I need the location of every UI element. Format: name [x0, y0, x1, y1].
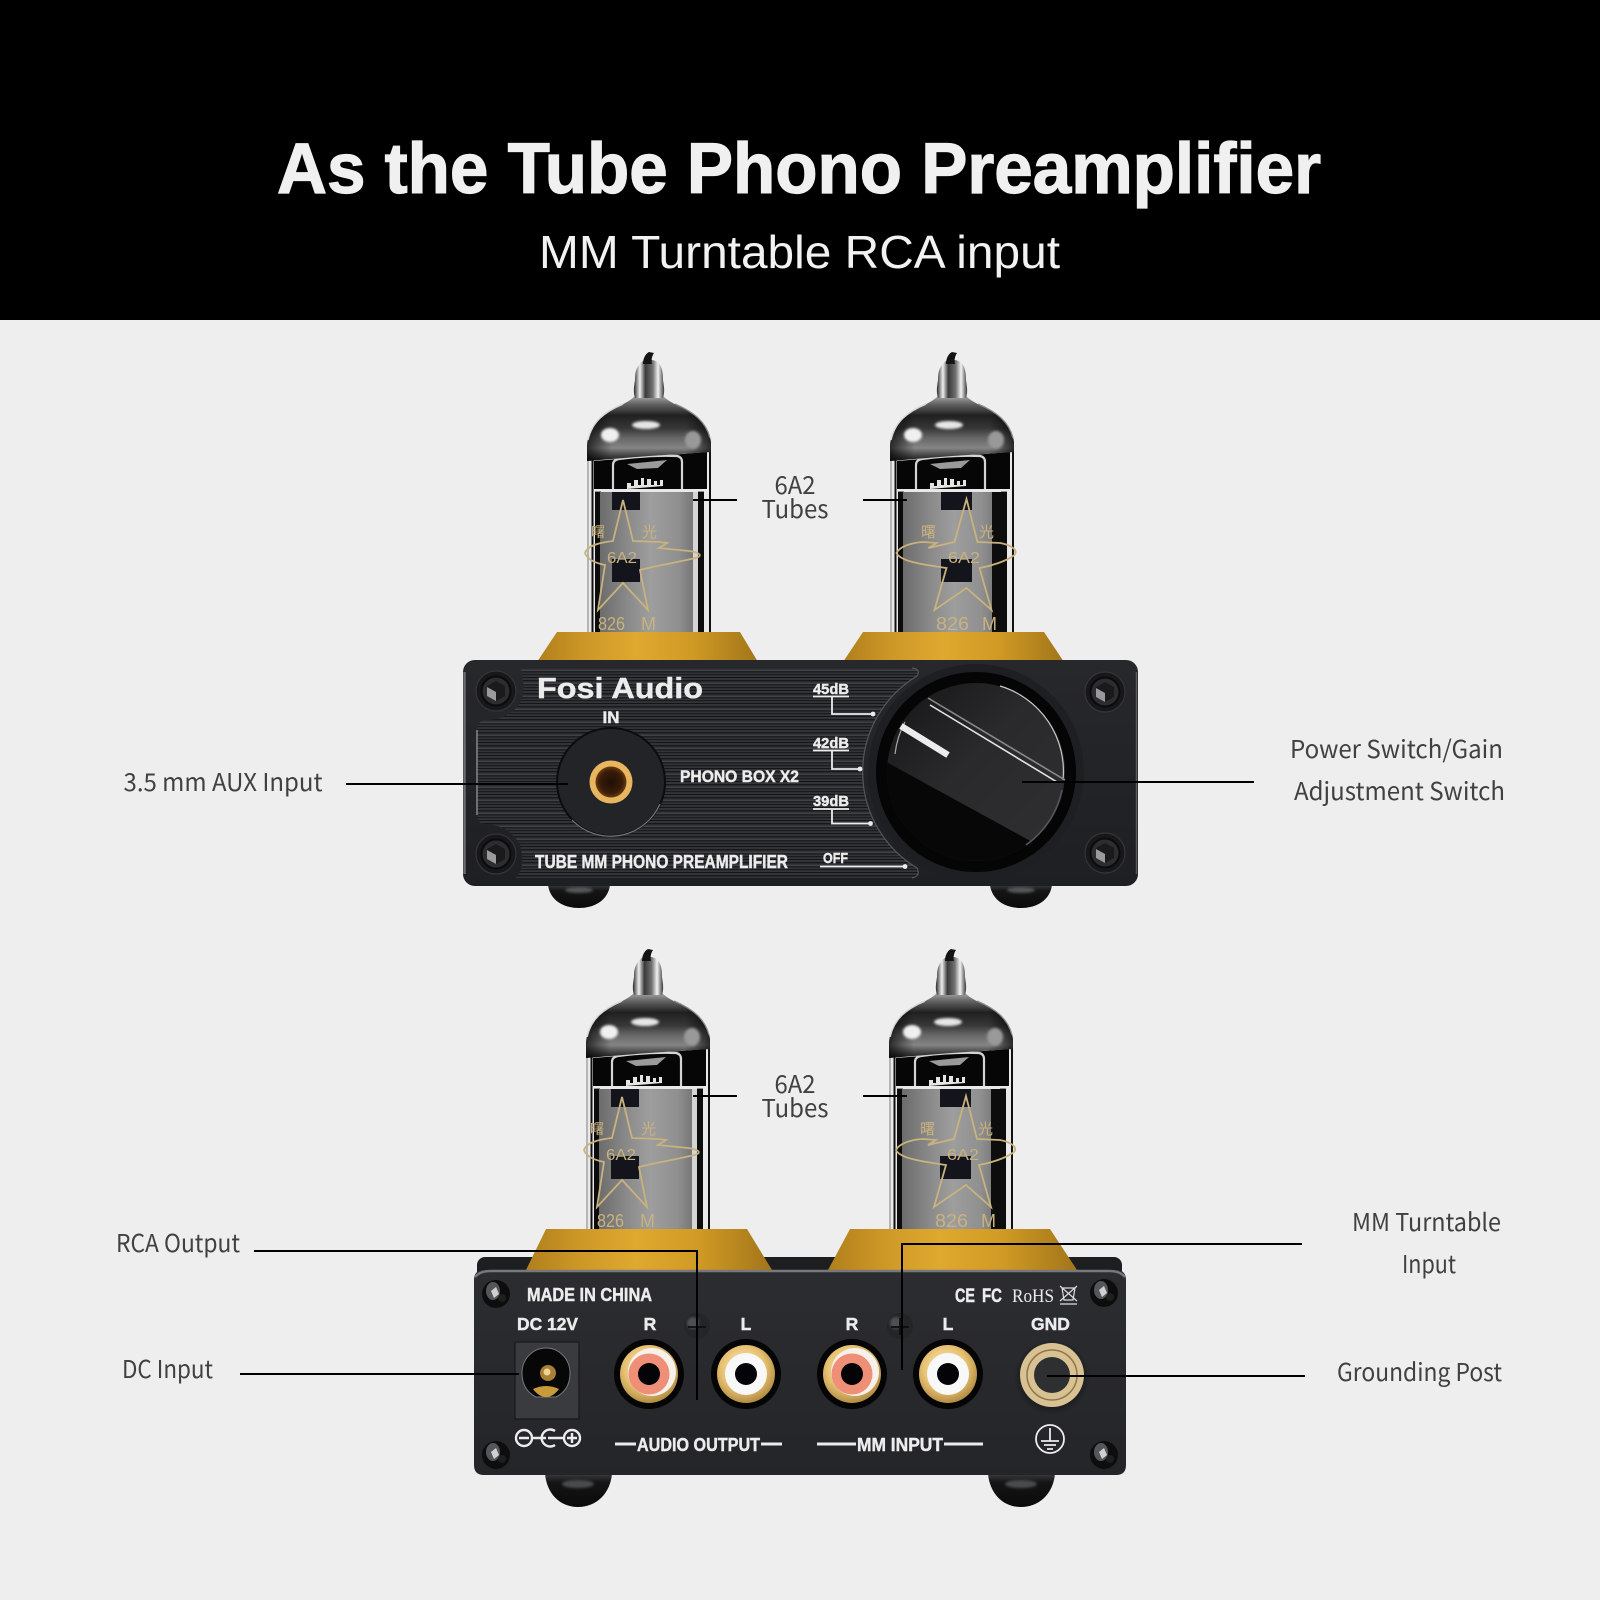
AUX jack — [557, 728, 665, 836]
gain knob — [876, 664, 1076, 872]
rubber foot: rear left — [545, 1474, 612, 1507]
callout: rear 6A2 tubes: Tubes — [762, 1090, 828, 1125]
gain marks — [813, 681, 907, 869]
brushed nameplate — [477, 668, 918, 878]
compliance marks: FC — [982, 1286, 1002, 1307]
subtitle: MM Turntable RCA input — [539, 226, 1060, 278]
screw: bottom right — [1085, 833, 1125, 873]
callout: MM turntable input: Input — [1402, 1246, 1456, 1281]
grounding post — [1014, 1339, 1090, 1415]
tube: rear right: M — [981, 1211, 996, 1231]
rubber foot: front right — [990, 885, 1052, 908]
callout: top 6A2 tubes: Tubes — [762, 491, 828, 526]
callout: grounding post: Grounding Post — [1337, 1354, 1502, 1389]
callout: MM turntable input: MM Turntable — [1352, 1204, 1501, 1239]
gain marks: 45dB — [813, 681, 849, 698]
channel label: output L: L — [741, 1314, 752, 1334]
tube: rear left: M — [640, 1211, 655, 1231]
tube: rear right: 6A2 — [947, 1147, 979, 1164]
tube: front left — [585, 352, 711, 634]
tube: front left: 826 — [598, 614, 625, 634]
tube: rear left: 光 — [641, 1121, 656, 1138]
tube: rear left: 6A2 — [606, 1147, 636, 1164]
front panel — [463, 660, 1138, 886]
screw: top left — [476, 671, 516, 711]
gain marks: 42dB — [813, 735, 849, 752]
header band — [0, 0, 1600, 320]
top unit: front view — [463, 352, 1138, 908]
callout: RCA output: RCA Output — [116, 1225, 240, 1260]
tube: rear left: 曙 — [590, 1121, 604, 1137]
audio output label: AUDIO OUTPUT — [637, 1435, 760, 1455]
gold tube socket: front left — [537, 632, 758, 662]
screw: rear top left — [482, 1280, 510, 1308]
channel label: input R: R — [846, 1314, 859, 1334]
tube: front right: 826 — [936, 614, 969, 634]
brand name: Fosi Audio — [537, 673, 703, 705]
IN label: IN — [602, 708, 620, 727]
tube: rear left — [584, 949, 710, 1231]
compliance marks — [955, 1286, 1077, 1307]
rubber foot: rear right — [988, 1474, 1055, 1507]
DC polarity symbol — [516, 1429, 580, 1446]
ground symbol — [1036, 1425, 1064, 1453]
gold tube socket: front right — [843, 632, 1064, 662]
compliance marks: RoHS — [1012, 1286, 1054, 1307]
RCA socket: output L — [711, 1339, 781, 1409]
callout: top 6A2 tubes — [693, 467, 907, 526]
screw: rear top right — [1090, 1279, 1118, 1307]
screw: output bridge — [684, 1313, 710, 1339]
callout: power switch: Power Switch/Gain — [1290, 731, 1503, 766]
callout: power switch — [1022, 731, 1505, 808]
tube: rear left: 826 — [597, 1211, 624, 1231]
tube: front right: 曙 — [921, 524, 936, 541]
RCA socket: output R — [614, 1339, 684, 1409]
model label: PHONO BOX X2 — [680, 767, 799, 786]
callout: 3.5 mm AUX input: 3.5 mm AUX Input — [124, 764, 322, 799]
channel label: output R: R — [644, 1314, 657, 1334]
rear panel — [474, 1270, 1126, 1475]
screw: input bridge — [887, 1313, 913, 1339]
chassis top — [477, 1257, 1122, 1287]
ground label: GND — [1031, 1314, 1070, 1334]
tube: front left: M — [641, 614, 656, 634]
rubber foot: front left — [548, 885, 610, 908]
tube: front right: 光 — [979, 524, 994, 541]
callout: power switch: Adjustment Switch — [1294, 773, 1505, 808]
callout: top 6A2 tubes: 6A2 — [774, 467, 816, 502]
screw: top right — [1085, 672, 1125, 712]
product line label: TUBE MM PHONO PREAMPLIFIER — [535, 852, 788, 872]
tube: front right: M — [982, 614, 997, 634]
callout: rear 6A2 tubes — [693, 1066, 907, 1125]
MM input label: MM INPUT — [857, 1435, 943, 1455]
DC jack — [515, 1342, 579, 1419]
screw: rear bottom left — [482, 1441, 510, 1469]
tube: front right — [890, 352, 1016, 634]
tube: front left: 曙 — [591, 524, 605, 540]
RCA socket: input L — [913, 1339, 983, 1409]
gain marks: OFF — [823, 850, 848, 867]
tube: rear right: 光 — [978, 1121, 993, 1138]
callout: rear 6A2 tubes: 6A2 — [774, 1066, 816, 1101]
origin label: MADE IN CHINA — [527, 1285, 652, 1305]
callout: DC input: DC Input — [122, 1351, 213, 1386]
gold tube socket: rear left — [526, 1229, 772, 1270]
title: As the Tube Phono Preamplifier — [277, 130, 1321, 209]
compliance marks: CE — [955, 1286, 975, 1307]
callout: RCA output — [116, 1225, 697, 1400]
tube: front right: 6A2 — [948, 550, 980, 567]
screw: rear bottom right — [1090, 1441, 1118, 1469]
channel label: input L: L — [943, 1314, 954, 1334]
tube: front left: 6A2 — [607, 550, 637, 567]
tube: rear right: 826 — [935, 1211, 968, 1231]
tube: front left: 光 — [642, 524, 657, 541]
tube: rear right — [889, 949, 1015, 1231]
gold tube socket: rear right — [828, 1229, 1077, 1270]
DC input label: DC 12V — [517, 1314, 578, 1334]
gain marks: 39dB — [813, 793, 849, 810]
tube: rear right: 曙 — [920, 1121, 935, 1138]
callout: MM turntable input — [902, 1204, 1501, 1370]
bottom unit: rear view — [474, 949, 1126, 1507]
RCA socket: input R — [817, 1339, 887, 1409]
screw: bottom left — [476, 834, 516, 874]
